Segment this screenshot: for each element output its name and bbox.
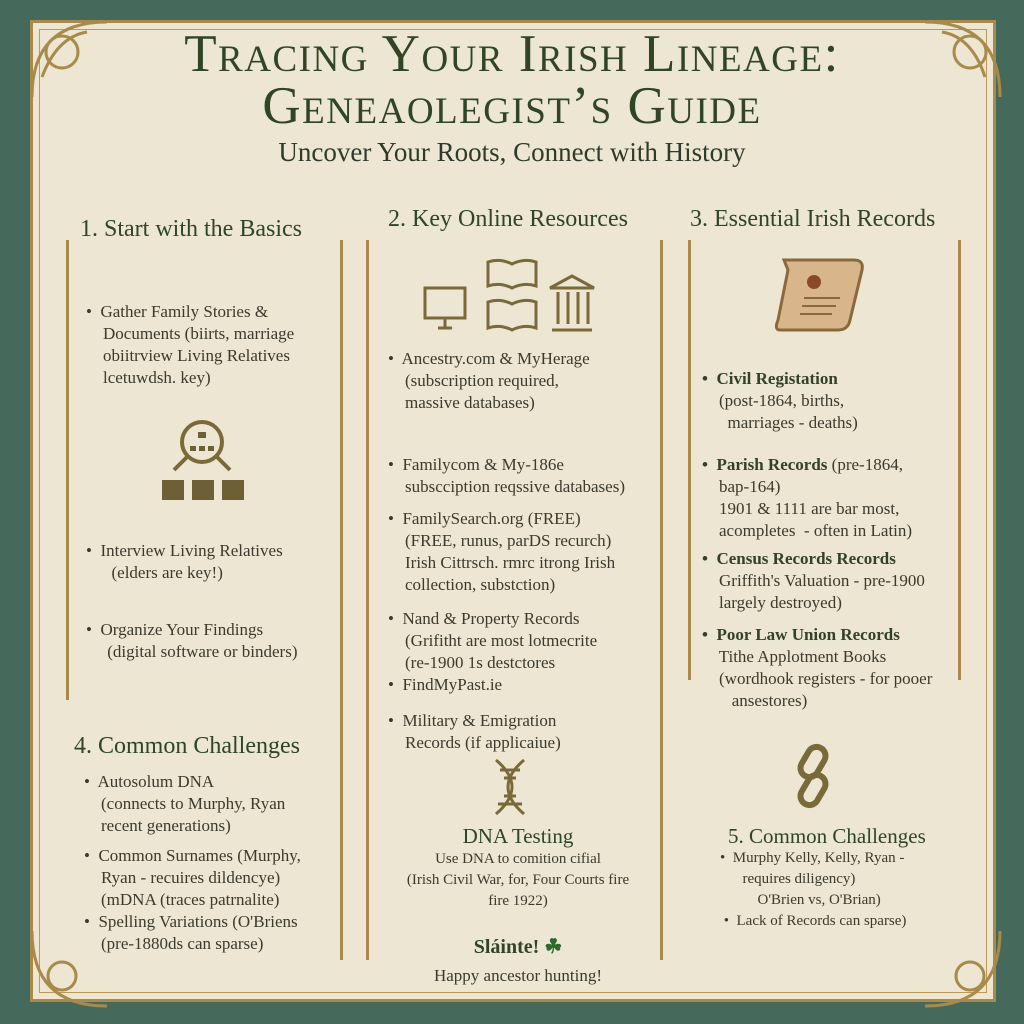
icon: DNA bbox=[495, 759, 525, 815]
panel: essential records: largely destroyed) bbox=[719, 593, 842, 612]
bullets: requires diligency) bbox=[742, 871, 855, 887]
bullets bbox=[720, 850, 906, 929]
resource list: (subscription required, bbox=[405, 371, 559, 390]
panel: online resources: • Military & Emigration bbox=[388, 711, 556, 730]
panel: common challenges 4: • Spelling Variations (O'Briens bbox=[84, 912, 298, 931]
bullet interview bbox=[86, 541, 283, 582]
bullet text: • Gather Family Stories & bbox=[86, 302, 268, 321]
panel: online resources: (re-1900 1s destctores bbox=[405, 653, 555, 672]
panel: essential records bbox=[690, 206, 935, 710]
icon: broken chain bbox=[798, 744, 828, 808]
panel: online resources: Records (if applicaiue) bbox=[405, 733, 561, 752]
panel: essential records: Tithe Applotment Books bbox=[719, 647, 886, 666]
panel: essential records: bap-164) bbox=[719, 477, 780, 496]
heading 2: 2. Key Online Resources bbox=[388, 206, 628, 232]
panel: essential records: acompletes - often in Latin) bbox=[719, 521, 912, 540]
title: Geneaolegist’s Guide bbox=[262, 77, 762, 135]
bullet text: lcetuwdsh. key) bbox=[103, 368, 211, 387]
panel: essential records: ansestores) bbox=[732, 691, 807, 710]
icon: family tree magnifier bbox=[162, 420, 244, 500]
bullet text: obiitrview Living Relatives bbox=[103, 346, 290, 365]
bullets: • Murphy Kelly, Kelly, Ryan - bbox=[720, 850, 904, 866]
panel: online resources: • FindMyPast.ie bbox=[388, 675, 502, 694]
records list bbox=[702, 369, 858, 432]
bullet text bbox=[86, 302, 294, 387]
records list: • Civil Registation bbox=[702, 369, 838, 388]
panel: essential records: 1901 & 1111 are bar most, bbox=[719, 499, 899, 518]
panel: essential records: • Parish Records (pre-1864, bbox=[702, 455, 903, 474]
subtitle: Uncover Your Roots, Connect with History bbox=[278, 137, 746, 167]
panel: essential records: • Census Records Records bbox=[702, 549, 896, 568]
panel: online resources: (Grifitht are most lotmecrite bbox=[405, 631, 597, 650]
panel: common challenges 4: • Common Surnames (Murphy, bbox=[84, 846, 301, 865]
resource list: • Ancestry.com & MyHerage bbox=[388, 349, 590, 368]
panel: essential records: • Poor Law Union Records bbox=[702, 625, 900, 644]
bullets: O'Brien vs, O'Brian) bbox=[758, 892, 881, 908]
bullets bbox=[84, 772, 285, 835]
panel: common challenges 4 bbox=[74, 733, 301, 953]
bullets: recent generations) bbox=[101, 816, 231, 835]
panel: online resources: • Familycom & My-186e bbox=[388, 455, 564, 474]
panel: online resources bbox=[388, 206, 629, 985]
bullet interview: (elders are key!) bbox=[112, 563, 223, 582]
panel: online resources: • Nand & Property Records bbox=[388, 609, 580, 628]
panel: common challenges 4: (pre-1880ds can sparse) bbox=[101, 934, 263, 953]
heading 4: 4. Common Challenges bbox=[74, 733, 300, 759]
icon: scroll bbox=[774, 258, 864, 332]
bullets: (connects to Murphy, Ryan bbox=[101, 794, 285, 813]
DNA testing: (Irish Civil War, for, Four Courts fire bbox=[407, 872, 629, 888]
bullet text: Documents (biirts, marriage bbox=[103, 324, 294, 343]
panel: online resources: Irish Cittrsch. rmrc itrong Irish bbox=[405, 553, 615, 572]
vine dividers bbox=[66, 240, 80, 700]
panel: common challenges 5 bbox=[720, 824, 926, 929]
bullet organize: (digital software or binders) bbox=[107, 642, 298, 661]
bullet organize bbox=[86, 620, 298, 661]
panel: online resources: subscciption reqssive databases) bbox=[405, 477, 625, 496]
closing: Sláinte! ☘ bbox=[474, 936, 562, 958]
closing bbox=[434, 936, 602, 985]
records list: (post-1864, births, bbox=[719, 391, 844, 410]
bullets: • Lack of Records can sparse) bbox=[724, 913, 906, 929]
panel: essential records: Griffith's Valuation - pre-1900 bbox=[719, 571, 925, 590]
panel: online resources: • FamilySearch.org (FREE) bbox=[388, 509, 581, 528]
panel: common challenges 4: (mDNA (traces patrnalite) bbox=[101, 890, 279, 909]
records list: marriages - deaths) bbox=[728, 413, 858, 432]
DNA testing bbox=[407, 824, 629, 909]
DNA testing: Use DNA to comition cifial bbox=[435, 851, 601, 867]
icons: computer, books, building bbox=[424, 258, 595, 332]
title bbox=[184, 25, 840, 135]
panel: online resources: (FREE, runus, parDS recurch) bbox=[405, 531, 611, 550]
DNA testing: DNA Testing bbox=[463, 824, 573, 848]
closing: Happy ancestor hunting! bbox=[434, 966, 602, 985]
panel: common challenges 4: Ryan - recuires dildencye) bbox=[101, 868, 280, 887]
resource list: massive databases) bbox=[405, 393, 535, 412]
resource list bbox=[388, 349, 590, 412]
panel: essential records: (wordhook registers - for pooer bbox=[719, 669, 932, 688]
bullets: • Autosolum DNA bbox=[84, 772, 214, 791]
DNA testing: fire 1922) bbox=[488, 893, 548, 909]
bullet interview: • Interview Living Relatives bbox=[86, 541, 283, 560]
panel: start with basics bbox=[80, 216, 302, 661]
title: Tracing Your Irish Lineage: bbox=[184, 25, 840, 83]
heading 3: 3. Essential Irish Records bbox=[690, 206, 935, 232]
heading 1: 1. Start with the Basics bbox=[80, 216, 302, 242]
heading 5: 5. Common Challenges bbox=[728, 824, 926, 848]
bullet organize: • Organize Your Findings bbox=[86, 620, 263, 639]
panel: online resources: collection, substction) bbox=[405, 575, 555, 594]
